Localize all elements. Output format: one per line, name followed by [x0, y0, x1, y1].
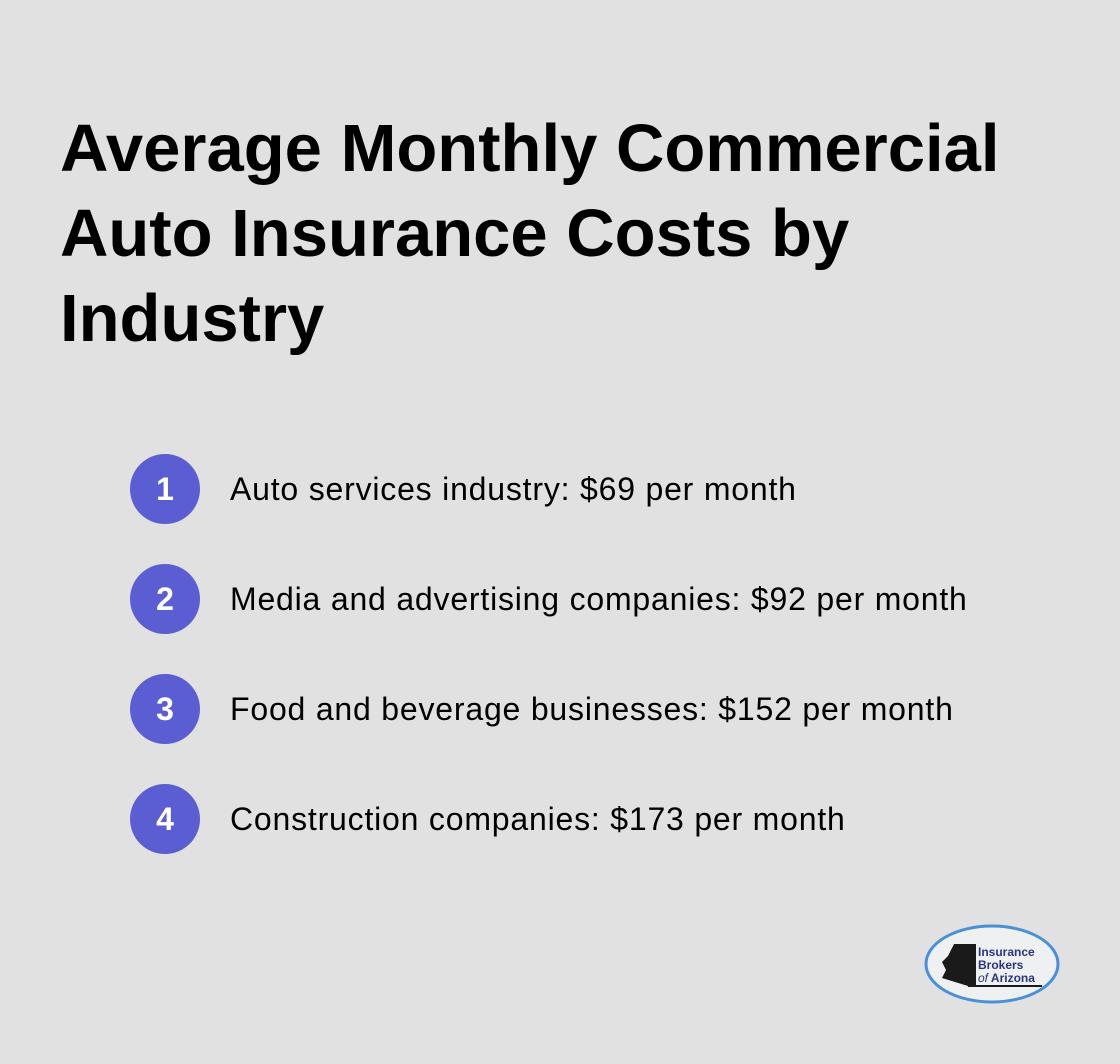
item 2: [130, 564, 968, 634]
title: Average Monthly Commercial Auto Insurance Costs by Industry: [60, 111, 1000, 356]
item 2: Media and advertising companies: $92 per month: [230, 581, 968, 617]
item 4: Construction companies: $173 per month: [230, 801, 846, 837]
item 3: Food and beverage businesses: $152 per month: [230, 691, 954, 727]
item 1: [130, 454, 797, 524]
item 4: 4: [156, 801, 174, 837]
logo: Brokers: [978, 958, 1024, 972]
item 3: [130, 674, 954, 744]
item 2: 2: [156, 581, 174, 617]
logo: Insurance: [978, 945, 1035, 959]
item 4: [130, 784, 846, 854]
logo: [924, 924, 1060, 1004]
item 1: Auto services industry: $69 per month: [230, 471, 797, 507]
item 3: 3: [156, 691, 174, 727]
logo: of Arizona: [978, 971, 1035, 985]
item 1: 1: [156, 471, 174, 507]
